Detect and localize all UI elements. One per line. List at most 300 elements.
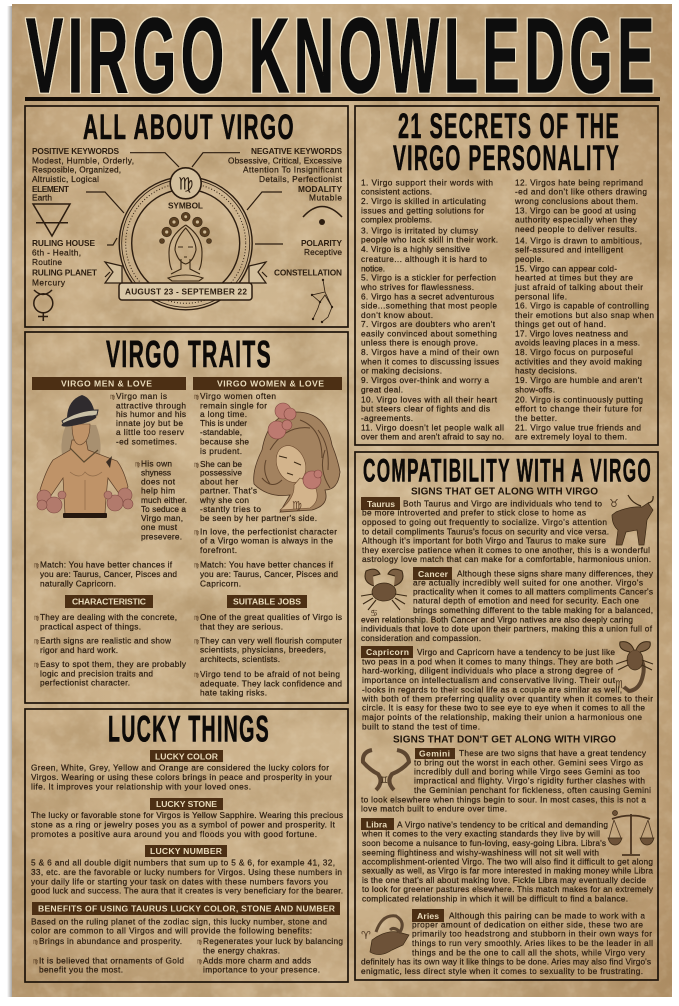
text block: secrets 12 to 21: are extremely loyal to them. [515, 431, 627, 441]
text block: benefits left list: benefit you the most. [39, 965, 123, 975]
text block: characteristic list: rigor and hard work. [40, 645, 118, 655]
text block: suitable jobs list: that they are serious. [200, 621, 283, 631]
text block: secrets 1 to 11: 3. Virgo is irritated by clumsy [361, 225, 479, 235]
text block: man 2: To seduce a [141, 504, 186, 514]
text block: woman 2: ♍ [194, 462, 199, 469]
text block: lucky color: Green, White, Grey, Yellow and Orange are considered the lucky colors for [31, 763, 329, 773]
text block: secrets 1 to 11: 8. Virgos have a mind of their own [361, 347, 499, 357]
text block: secrets 12 to 21: 13. Virgo can be good at using [515, 205, 636, 215]
panel: lucky things [25, 709, 348, 982]
text block: secrets 12 to 21: 16. Virgo is capable of controlling [515, 301, 649, 311]
text block: secrets 12 to 21: 21. Virgo value true friends and [515, 422, 641, 432]
text block: Taurus: Both Taurus and Virgo are individuals who tend to [403, 499, 602, 509]
text block: Cancer: individuals that love to dote upon their partners, making this a union full of [361, 624, 653, 634]
text block: negative keywords [228, 146, 343, 184]
text block: Gemini: love match built to endure over time. [361, 804, 507, 814]
text block: lucky number [31, 858, 343, 896]
text block: woman 1 [194, 391, 276, 456]
text block: Aries: definitely has its own way it like things to be done. Aries may also find Virgo's [361, 957, 651, 967]
text block: element: Earth [32, 193, 52, 203]
text block: secrets 1 to 11: 4. Virgo is a highly sensitive [361, 244, 470, 254]
text block: woman 3: In love, the perfectionist character [200, 526, 337, 536]
text block: negative keywords: Obsessive, Critical, Excessive [228, 156, 342, 166]
icon: virgo symbol [170, 168, 201, 199]
subheading bar: benefits: BENEFITS OF USING TAURUS LUCKY COLOR, STONE AND NUMBER [38, 904, 336, 914]
text block: suitable jobs list: hate taking risks. [200, 688, 267, 698]
text block: lucky number: 5 & 6 and all double digit numbers that sum up to 5 & 6, for example 41, 32, [31, 858, 335, 868]
text block: women match [194, 560, 338, 589]
text block: lucky color [31, 763, 332, 792]
text block: secrets 1 to 11: consistent actions. [361, 187, 432, 197]
icon: scorpion: ♏ [615, 678, 625, 691]
text block: secrets 12 to 21: 17. Virgo loves neatness and [515, 328, 628, 338]
text block: Aries: proper amount of dedication on either side, these two are [412, 919, 643, 929]
text block: element [32, 184, 69, 203]
text block: Aries: primarily too headstrong and stubborn in their own ways for [412, 929, 652, 939]
tag: Cancer [413, 567, 452, 580]
text block: man 2: His own [141, 459, 172, 469]
text block: men match: ♍ [34, 563, 39, 570]
text block: Libra: accomplishment-oriented Virgo. The two will also find it difficult to get along [362, 856, 653, 866]
text block: Libra: A Virgo native's tendency to be critical and demanding [397, 819, 608, 829]
text block: Aries [361, 910, 653, 976]
text block: secrets 1 to 11: -agreements. [361, 413, 413, 423]
text block: man 1: attractive through [116, 400, 186, 410]
text block: woman 1: a long time. [200, 409, 247, 419]
text block: suitable jobs list: They can very well flourish computer [200, 636, 342, 646]
icon: bull: ♉ [609, 497, 619, 510]
subheading bar: Virgo women and love [193, 377, 342, 390]
text block: secrets 1 to 11: or making decisions. [361, 366, 442, 376]
illustration: woman with roses [254, 403, 340, 512]
text block: Gemini: to look elsewhere when things begin to sour. In most cases, this is not a [361, 795, 646, 805]
text block: Capricorn: Virgo and Capricorn have a tendency to be just like [417, 647, 615, 657]
tag: Capricorn [361, 646, 413, 658]
text block: man 1 [110, 391, 186, 447]
text block: Libra: when it comes to the very exacting standards they live by will [361, 829, 600, 839]
text block: secrets 1 to 11: 7. Virgos are doubters who aren't [361, 319, 496, 329]
text block: women match: Match: You have better chances if [200, 560, 334, 570]
text block: positive keywords [32, 146, 134, 184]
rings [119, 177, 252, 310]
text block: Libra: is the one that's all about making love. Fickle Libra may eventually decide [362, 875, 646, 885]
tag: Cancer: Cancer [418, 569, 449, 579]
icon: twin snakes [363, 750, 409, 790]
text block: women match: Capricorn. [200, 579, 241, 589]
text block: men match [34, 560, 177, 589]
text block: lucky color: life. It improves your relationship with your loved ones. [31, 782, 251, 792]
text block: secrets 1 to 11: 5. Virgo is a stickler for perfection [361, 273, 496, 283]
text block: ruling planet: Mercury [32, 277, 66, 287]
text block: Capricorn: built to stand the test of time. [362, 721, 480, 731]
text block: woman 3: forefront. [200, 545, 237, 555]
text block: woman 1: -standable, [200, 427, 242, 437]
text block: lucky stone: stone as a ring or jewelry poses you as a symbol of power and prosperity. It [31, 820, 336, 830]
icon: crab [361, 569, 407, 619]
text block: men match: you are: Taurus, Cancer, Pisces and [40, 569, 177, 579]
text block: Cancer: even relationship. Both Cancer and Virgo natives are also deeply caring [361, 614, 633, 624]
text block: ruling planet: RULING PLANET [32, 268, 97, 278]
text block: Libra [361, 819, 654, 903]
text block: Cancer: natural depth of emotion and need for security. Each one [413, 596, 639, 606]
ribbon with dates: AUGUST 23 - SEPTEMBER 22 [125, 287, 247, 297]
text block: lucky number: 33, etc. are the favorable or lucky numbers for Virgos. Using these numbers in [31, 867, 342, 877]
text block: woman 2: possessive [200, 468, 242, 478]
icon: woman with flowers [160, 212, 212, 281]
text block: benefits left list: ♍ [33, 939, 38, 946]
subheading bar: suitable jobs: SUITABLE JOBS [233, 597, 301, 607]
icon: ram: ♈ [361, 929, 371, 942]
sign: Capricorn [361, 642, 653, 731]
text block: characteristic list [34, 612, 187, 688]
text block: Capricorn: major points of the relationship, making their union a harmonious one [362, 712, 642, 722]
text block: Libra: sexually as well, as Virgo is far more interested in making money while Libra [362, 866, 653, 876]
text block: secrets 1 to 11: unless there is enough prove. [361, 337, 478, 347]
text block: Taurus [362, 499, 651, 564]
text block: benefits right list: the energy chakras. [203, 945, 280, 955]
text block: man 2: Virgo man, [141, 513, 183, 523]
text block: Taurus: be more introverted and prefer to stick close to home as [362, 508, 586, 518]
tag: Aries [412, 909, 444, 922]
text block: secrets 12 to 21 [514, 177, 654, 441]
text block: characteristic list: practical aspect of things. [40, 621, 141, 631]
text block: woman 2: be seen by her partner's side. [200, 513, 317, 523]
sign: Cancer [361, 567, 654, 643]
text block: men match: naturally Capricorn. [40, 579, 116, 589]
text block: lucky number: good luck and success. The aura that it creates is very beneficiary for the bearer. [31, 886, 343, 896]
text block: Aries: enigmatic, less direct style when it comes to sexuality to be frustrating. [361, 966, 643, 976]
text block: secrets 12 to 21: people. [515, 254, 544, 264]
text block: suitable jobs list: adequate. They lack confidence and [200, 678, 342, 688]
text block: negative keywords: NEGATIVE KEYWORDS [251, 146, 342, 156]
text block: benefits left list: Brings in abundance and prosperity. [39, 936, 182, 946]
text block: Capricorn: circle. It is easy for these two to see eye to eye when it comes to all the [362, 703, 645, 713]
text block: benefits right list: Regenerates your luck by balancing [203, 936, 343, 946]
text block: woman 2: -stantly tries to [200, 504, 261, 514]
text block: characteristic list: Easy to spot them, they are probably [40, 659, 187, 669]
text block: secrets 1 to 11: who strives for flawlessness. [360, 282, 474, 292]
text block: women match: you are: Taurus, Cancer, Pisces and [200, 569, 338, 579]
text block: characteristic list: ♍ [34, 639, 39, 646]
icon: bull [609, 495, 653, 545]
subheading bar: suitable jobs [227, 595, 307, 608]
text block: secrets 1 to 11: 6. Virgo has a secret adventurous [361, 291, 494, 301]
heading: Virgo traits: VIRGO TRAITS [106, 334, 272, 376]
subheading: signs that do not get along: SIGNS THAT DON'T GET ALONG WITH VIRGO [393, 734, 616, 745]
text block: secrets 1 to 11: issues and getting solutions for [361, 205, 484, 215]
text block: secrets 12 to 21: avoids leaving places in a mess. [515, 337, 640, 347]
text block: benefits intro: Based on the ruling planet of the zodiac sign, this lucky number, stone and [31, 916, 327, 926]
text block: secrets 12 to 21: 18. Virgo focus on purposeful [515, 347, 633, 357]
text block: man 2: ♍ [135, 462, 140, 469]
text block: Taurus: they exercise patience when it comes to one another, this is a wonderful [362, 545, 650, 555]
icon: earth element [33, 204, 70, 236]
text block: secrets 1 to 11: 10. Virgo loves with all their heart [361, 394, 498, 404]
text block: secrets 12 to 21: the better. [515, 413, 557, 423]
text block: ruling planet [32, 268, 97, 287]
text block: secrets 12 to 21: things get out of hand. [515, 319, 606, 329]
text block: secrets 12 to 21: 12. Virgos hate being reprimand [515, 177, 643, 187]
text block: man 1: a little too reserv [116, 427, 185, 437]
text block: secrets 1 to 11: 11. Virgo doesn't let people walk all [361, 422, 504, 432]
heading: lucky things: LUCKY THINGS [108, 709, 270, 750]
text block: Gemini: to bring out the worst in each other. Gemini sees Virgo as [414, 757, 643, 767]
text block: secrets 1 to 11: great deal. [361, 384, 403, 394]
text block: ruling house: RULING HOUSE [32, 238, 95, 248]
text block: secrets 1 to 11: notice. [361, 264, 385, 274]
text block: Taurus: Although it's important for both Virgo and Taurus to make sure [362, 536, 606, 546]
text block: secrets 1 to 11 [360, 177, 504, 441]
text block: women match: ♍ [194, 563, 199, 570]
icon: scales [608, 810, 654, 855]
subheading bar: lucky stone: LUCKY STONE [156, 799, 217, 809]
text block: lucky stone [31, 810, 343, 839]
text block: ruling house [32, 238, 95, 267]
subheading bar: lucky stone [150, 798, 223, 810]
text block: modality: Mutable [309, 193, 342, 203]
subheading: signs that get along: SIGNS THAT GET ALONG WITH VIRGO [411, 486, 598, 497]
text block: Capricorn: -looks in regards to their social life as a couple are similar as well, [362, 684, 622, 694]
text block: woman 1: ♍ [194, 394, 199, 401]
icon: virgo symbol: ♍ [178, 174, 193, 194]
text block: secrets 12 to 21: hearted at times but they are [515, 273, 633, 283]
text block: man 1: Virgo man is [116, 391, 167, 401]
text block: man 2 [135, 459, 187, 541]
sign: Gemini [361, 748, 651, 814]
text block: secrets 12 to 21: show-offs. [515, 384, 555, 394]
ribbon with dates [105, 262, 266, 300]
text block: woman 3: of a Virgo woman is always in the [200, 536, 333, 546]
text block: woman 3 [194, 526, 337, 555]
central zodiac medallion [105, 168, 266, 310]
text block: secrets 1 to 11: easily convinced about something [361, 328, 497, 338]
text block: characteristic list: They are dealing with the concrete, [40, 612, 177, 622]
text block: secrets 1 to 11: when it comes to discussing issues [360, 356, 499, 366]
text block: modality: MODALITY [298, 184, 342, 194]
text block: Gemini: These are two signs that have a great tendency [459, 748, 647, 758]
text block: benefits right list [197, 936, 343, 975]
icon: scorpion [615, 642, 653, 691]
text block: secrets 1 to 11: people who lack skill in their work. [361, 235, 498, 245]
text block: Libra: soon become a nuisance to fun-loving, easy-going Libra. Libra's [362, 838, 606, 848]
tag: Gemini: Gemini [419, 749, 450, 759]
text block: secrets 12 to 21: 19. Virgo are humble and aren't [515, 375, 643, 385]
text block: Capricorn: importance on intellectualism and conservative living. Their out [362, 675, 616, 685]
text block: secrets 12 to 21: -ed and don't like others drawing [515, 187, 647, 197]
text block: suitable jobs list: scientists, physicians, breeders, [200, 645, 326, 655]
text block: secrets 1 to 11: over them and aren't afraid to say no. [361, 431, 504, 441]
text block: Gemini: impractical and flighty. Virgo's rigidity further clashes with [414, 776, 645, 786]
text block: secrets 1 to 11: 9. Virgos over-think and worry a [361, 375, 489, 385]
text block: ruling house: Routine [32, 257, 62, 267]
text block: man 1: his humor and his [116, 409, 186, 419]
text block: secrets 1 to 11: creature... although it is hard to [361, 254, 487, 264]
icon: mercury [34, 290, 53, 321]
text block: modality [298, 184, 342, 203]
panel: all about Virgo [25, 106, 348, 327]
text block: benefits left list: ♍ [33, 958, 38, 965]
text block: woman 3: ♍ [194, 529, 199, 536]
label: symbol: SYMBOL [168, 201, 203, 211]
text block: negative keywords: Details, Perfectionist [259, 174, 343, 184]
text block: woman 2: partner. That's [200, 486, 257, 496]
illustration: woman with roses: ♍ [292, 499, 302, 512]
text block: men match: Match: You have better chances if [40, 560, 173, 570]
text block: benefits left list: It is believed that ornaments of Gold [39, 955, 184, 965]
text block: secrets 12 to 21: 15. Virgo can appear cold- [515, 264, 617, 274]
text block: positive keywords: Resposible, Organized, [32, 165, 121, 175]
text block: benefits right list: Adds more charm and adds [203, 955, 311, 965]
text block: suitable jobs list: One of the great qualities of Virgo is [200, 612, 342, 622]
text block: lucky color: Virgos. Wearing or using these colors brings in peace and prosperity in your [31, 772, 332, 782]
text block: secrets 12 to 21: need people to deliver results. [515, 224, 637, 234]
icon: ram [361, 916, 409, 955]
text block: man 1: -ed sometimes. [116, 437, 177, 447]
text block: Cancer: are actually incredibly well suited for one another. Virgo's [413, 577, 643, 587]
text block: characteristic list: ♍ [34, 662, 39, 669]
text block: characteristic list: perfectionist character. [40, 678, 130, 688]
text block: Cancer [361, 569, 654, 643]
heading: all about Virgo: ALL ABOUT VIRGO [83, 108, 295, 147]
text block: benefits intro: color are common to all Virgos and will provide the following benefits: [31, 925, 312, 935]
subheading bar: Virgo men and love: VIRGO MEN & LOVE [61, 379, 152, 389]
text block: benefits right list: ♍ [197, 958, 202, 965]
text block: Capricorn: with both of them preferring quality over quantity when it comes to their [361, 693, 653, 703]
text block: Cancer: practicality when it comes to all matters compliments Cancer's [413, 586, 653, 596]
panel: 21 secrets of the Virgo personality [355, 106, 658, 445]
text block: man 2: help him [141, 486, 175, 496]
sign: Libra [361, 810, 654, 903]
text block: suitable jobs list: architects, scientists. [200, 654, 280, 664]
roses on wrists [37, 488, 133, 513]
text block: polarity: Receptive [304, 247, 342, 257]
text block: lucky stone: The lucky or favorable stone for Virgos is Yellow Sapphire. Wearing this precious [31, 810, 343, 820]
text block: suitable jobs list: ♍ [194, 672, 199, 679]
text block: woman 2 [194, 459, 317, 523]
icon: twin snakes: ♊ [380, 776, 388, 786]
subheading bar: Virgo men and love [32, 377, 186, 390]
text block: Libra: seeming flightiness and wishy-washiness will not sit well with [362, 847, 599, 857]
text block: Aries: Although this pairing can be made to work with a [449, 910, 645, 920]
text block: secrets 1 to 11: complex problems. [361, 214, 432, 224]
text block: man 2: one must [141, 522, 178, 532]
text block: Gemini [361, 748, 651, 814]
text block: secrets 12 to 21: activities and they avoid making [515, 356, 642, 366]
tag: Libra [361, 818, 394, 830]
text block: suitable jobs list: ♍ [194, 639, 199, 646]
text block: benefits left list [33, 936, 184, 975]
text block: ruling house: 6th - Health, [32, 247, 81, 257]
text block: secrets 12 to 21: effort to change their future for [515, 404, 642, 414]
text block: woman 1: Virgo women often [200, 391, 276, 401]
icon: modality [303, 206, 342, 225]
text block: lucky number: your daily life or starting your task on dates with these numbers favors you [31, 876, 328, 886]
text block: constellation: CONSTELLATION [274, 268, 342, 278]
text block: secrets 12 to 21: their emotions but also snap when [515, 310, 654, 320]
tag: Capricorn: Capricorn [366, 647, 409, 657]
panel: Virgo traits [25, 332, 348, 703]
text block: lucky stone: promotes a positive aura around you and floods you with good fortune. [31, 829, 317, 839]
text block: secrets 12 to 21: authority especially when they [515, 214, 638, 224]
text block: woman 1: remain single for [200, 400, 267, 410]
text block: suitable jobs list [194, 612, 342, 698]
text block: secrets 1 to 11: 1. Virgo support their words with [361, 177, 493, 187]
tag: Taurus [361, 497, 400, 510]
panel: compatibility with a Virgo [355, 452, 658, 980]
text block: Capricorn: hard-working, diligent individuals who place a strong degree of [362, 666, 614, 676]
subheading bar: lucky number: LUCKY NUMBER [150, 846, 223, 856]
text block: man 2: presevere. [141, 531, 182, 541]
text block: secrets 12 to 21: wrong conclusions about them. [514, 196, 638, 206]
text block: man 1: ♍ [110, 394, 115, 401]
text block: suitable jobs list: ♍ [194, 615, 199, 622]
text block: secrets 12 to 21: just afraid of talking about their [514, 282, 643, 292]
text block: Taurus: opposed to going out frequently to socialize. Virgo's attention [362, 517, 607, 527]
text block: Cancer: consideration and compassion. [361, 633, 481, 643]
text block: secrets 12 to 21: 14. Virgo is drawn to ambitious, [515, 235, 642, 245]
text block: Taurus: astrology love match that can make for a comfortable, harmonious union. [362, 554, 651, 564]
text block: positive keywords: Modest, Humble, Orderly, [32, 156, 134, 166]
text block: secrets 1 to 11: side...something that most people [361, 301, 497, 311]
sign: Aries [361, 909, 653, 976]
text block: woman 1: This is under [200, 418, 247, 428]
text block: secrets 12 to 21: personal life. [515, 291, 567, 301]
illustration: man with hat [37, 395, 133, 518]
text block: woman 1: because she [200, 437, 249, 447]
text block: Cancer: Although these signs share many differences, they [457, 569, 654, 579]
connector lines [86, 153, 283, 277]
text block: secrets 12 to 21: hasty decisions. [515, 366, 577, 376]
tag: Libra: Libra [366, 819, 387, 829]
sign: Taurus [361, 495, 653, 564]
text block: woman 1: is prudent. [200, 446, 242, 456]
subheading bar: lucky color: LUCKY COLOR [155, 751, 219, 761]
text block: woman 2: why she con [199, 495, 249, 505]
tag: Taurus: Taurus [367, 499, 395, 509]
text block: man 1: innate joy but be [116, 418, 183, 428]
text block: characteristic list: ♍ [34, 615, 39, 622]
text block: Cancer: brings something different to the table making for a balanced, [413, 605, 653, 615]
text block: secrets 1 to 11: don't know about. [361, 310, 433, 320]
text block: man 2: shyness [141, 468, 171, 478]
subheading bar: characteristic [65, 595, 153, 608]
text block: benefits right list: ♍ [197, 939, 202, 946]
text block: Capricorn: two peas in a pod when it comes to many things. They are both [362, 656, 613, 666]
subheading bar: Virgo women and love: VIRGO WOMEN & LOVE [217, 379, 324, 389]
text block: Capricorn [361, 647, 653, 731]
tag: Aries: Aries [417, 911, 439, 921]
text block: benefits intro [31, 916, 327, 935]
text block: positive keywords: Altruistic, Logical [32, 174, 99, 184]
text block: Libra: complicated relationship in which it will be difficult to find a balance. [362, 893, 628, 903]
text block: Aries: things to run very smoothly. Aries likes to be the leader in all [412, 938, 653, 948]
text block: characteristic list: Earth signs are realistic and show [40, 636, 172, 646]
text block: characteristic list: logic and precision traits and [40, 668, 153, 678]
text block: secrets 1 to 11: but steers clear of fights and dis [361, 404, 490, 414]
text block: benefits right list: importance to your presence. [203, 965, 320, 975]
text block: Aries: things and be the one to call all the shots, while Virgo very [412, 947, 646, 957]
text block: secrets 12 to 21: 20. Virgo is continuously putting [515, 394, 643, 404]
text block: woman 2: She can be [200, 459, 242, 469]
text block: man 2: much either. [141, 495, 187, 505]
icon: constellation [311, 279, 333, 323]
text block: man 2: does not [141, 477, 176, 487]
text block: Taurus: to detail compliments Taurus's focus on security and vice versa. [362, 526, 609, 536]
text block: secrets 1 to 11: 2. Virgo is skilled in articulating [361, 196, 486, 206]
text block: polarity [301, 238, 342, 257]
text block: Gemini: the Geminian penchant for fickleness, often causing Gemini [414, 785, 651, 795]
text block: woman 2: about her [200, 477, 238, 487]
